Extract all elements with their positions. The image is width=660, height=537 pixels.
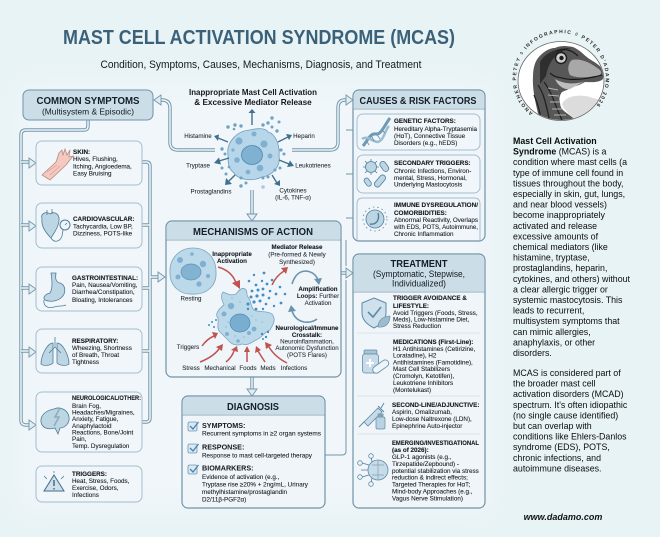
- text: medications: MEDICATIONS (First-Line):: [393, 339, 473, 346]
- text block: condition description: cytokines, and others) without: [513, 274, 631, 284]
- text: medications: Mast Cell Stabilizers: [393, 366, 450, 373]
- text: immune dysregulation: IMMUNE DYSREGULATION/: [394, 202, 478, 209]
- text block: condition description: anaphylaxis, or other: [513, 337, 595, 347]
- symptom card: triggers: [36, 466, 142, 502]
- card: immune dysregulation: [357, 198, 480, 240]
- icon: hand and forearm: [42, 149, 73, 180]
- title: MAST CELL ACTIVATION SYNDROME (MCAS): [63, 27, 455, 49]
- text: neurological: Brain Fog,: [72, 403, 101, 410]
- text: biomarkers criterion: D2/11β-PGF2α): [202, 496, 246, 504]
- card: secondary triggers: [357, 155, 480, 193]
- panel: common symptoms heading: (Multisystem & Episodic): [42, 106, 134, 116]
- arrows: triggers into cell: [200, 267, 288, 363]
- text: trigger avoidance: Meds), Low-histamine Diet,: [393, 316, 470, 324]
- illustration: mast cell releasing mediators: Cytokines: [279, 188, 307, 194]
- text: gastrointestinal: GASTROINTESTINAL:: [72, 275, 138, 282]
- text block: MCAS spectrum: but can overlap with: [513, 421, 592, 431]
- text: neurological: Reactions, Bone/Joint: [72, 430, 134, 436]
- heading: treatment: [373, 258, 465, 288]
- labels: mechanisms: Infections: [281, 365, 307, 372]
- labels: mechanisms: [177, 244, 339, 372]
- text block: condition description: histamine, tryptase,: [513, 253, 590, 263]
- text: trigger avoidance: Avoid Triggers (Foods, Stress,: [393, 310, 478, 317]
- icon: syringe and vial: [359, 403, 385, 429]
- text block: MCAS spectrum: (no single cause identified): [513, 410, 618, 420]
- text: emerging: reduction & indirect effects;: [392, 474, 468, 482]
- icon: lungs: [41, 337, 69, 365]
- labels: mechanisms: Synthesized): [279, 259, 315, 266]
- text: skin: Itching, Angioedema,: [73, 164, 132, 170]
- text: cardiovascular: CARDIOVASCULAR:: [73, 216, 134, 223]
- labels: mechanisms: Autonomic Dysfunction: [275, 345, 339, 352]
- text: medications: Leukotriene Inhibitors: [393, 380, 453, 387]
- text: neurological: Temp. Dysregulation: [72, 443, 130, 450]
- text: emerging: GLP-1 agonists (e.g.,: [392, 454, 452, 461]
- illustration: mast cell releasing mediators: Heparin: [293, 133, 315, 140]
- illustration: mast cell releasing mediators: Histamine: [184, 133, 212, 140]
- text: biomarkers criterion: methylhistamine/prostaglandin: [202, 489, 288, 496]
- text: triggers: Heat, Stress, Foods,: [72, 478, 130, 485]
- heading: treatment: TREATMENT: [390, 258, 448, 270]
- labels: mechanisms: Stress: [182, 365, 200, 372]
- text: secondary triggers: mental, Stress, Hormonal,: [394, 175, 467, 182]
- panel: diagnosis: [182, 396, 325, 508]
- text block: condition description: can mimic allergies,: [513, 327, 591, 337]
- panel: common symptoms heading: [23, 90, 153, 120]
- connectors between panels: [21, 95, 357, 455]
- text: biomarkers criterion: Evidence of activation (e.g.,: [202, 474, 280, 481]
- illustration: resting mast cell: Resting: [181, 296, 202, 302]
- labels: mechanisms: Loops: Further: [297, 293, 339, 300]
- text block: condition description: activated and release: [513, 221, 597, 231]
- icon: shield with leaf: [362, 298, 390, 328]
- text block: condition description: multisystem symptoms that: [513, 316, 620, 326]
- text: response criterion: RESPONSE:: [202, 442, 244, 452]
- text: medications: (Montelukast): [393, 387, 431, 394]
- text: emerging: Tirzepatide/Zepbound) -: [392, 461, 459, 468]
- item: trigger avoidance: [362, 295, 478, 330]
- icon: DNA helix: [362, 118, 390, 146]
- text block: condition description: condition where mast cells (a: [513, 157, 627, 167]
- text: biomarkers criterion: BIOMARKERS:: [202, 464, 254, 472]
- text block: MCAS spectrum: conditions like Ehlers-Danlos: [513, 432, 627, 442]
- text: emerging: Vagus Nerve Stimulation): [392, 496, 463, 502]
- text: second-line: Low-dose Naltrexone (LDN),: [392, 416, 472, 423]
- text: second-line: Aspirin, Omalizumab,: [392, 409, 452, 416]
- labels: mechanisms: Mediator Release: [272, 244, 323, 251]
- text: biomarkers criterion: Tryptase rise ≥20% + 2ng/mL, Urinary: [202, 482, 309, 488]
- labels: mechanisms: Meds: [260, 365, 276, 372]
- labels: mechanisms: Crosstalk:: [292, 332, 322, 339]
- illustration: resting mast cell: [170, 248, 216, 302]
- text block: MCAS spectrum: activation disorders (MCAD): [513, 389, 624, 399]
- text block: MCAS spectrum: MCAS is considered part of: [513, 368, 621, 378]
- labels: mechanisms: (POTS Flares): [287, 352, 327, 359]
- text: neurological: Headaches/Migraines,: [72, 410, 135, 416]
- text block: condition description: leads to recurrent,: [513, 306, 584, 316]
- text: neurological: Anaphylactoid: [72, 423, 112, 430]
- central heading: inappropriate activation: & Excessive Mediator Release: [194, 98, 312, 107]
- text: respiratory: of Breath, Throat: [72, 352, 119, 359]
- text block: condition description: and near blood vessels): [513, 200, 607, 210]
- text: neurological: Anxiety, Fatigue,: [72, 416, 119, 423]
- subtitle: Condition, Symptoms, Causes, Mechanisms, Diagnosis, and Treatment: [100, 59, 422, 71]
- text: trigger avoidance: TRIGGER AVOIDANCE &: [393, 295, 467, 302]
- text: skin: Hives, Flushing,: [73, 156, 118, 163]
- text: second-line: Epinephrine Auto-injector: [392, 423, 462, 430]
- text: immune dysregulation: COMORBIDITIES:: [394, 210, 447, 217]
- text block: condition description: excessive amounts of: [513, 231, 599, 241]
- text: skin: SKIN:: [73, 149, 90, 156]
- text: response criterion: Response to mast cell-targeted therapy: [202, 452, 313, 460]
- item: emerging: [358, 440, 479, 502]
- text block: condition description: tissues throughout the body,: [513, 178, 623, 188]
- text: secondary triggers: Chronic Infections, Environ-: [394, 168, 471, 175]
- panel: common symptoms heading: COMMON SYMPTOMS: [36, 95, 140, 107]
- text: trigger avoidance: Stress Reduction: [393, 323, 441, 330]
- text: triggers: TRIGGERS:: [72, 471, 107, 478]
- text: gastrointestinal: Bloating, Intolerances: [72, 297, 133, 304]
- text: respiratory: Wheezing, Shortness: [72, 345, 132, 352]
- text: immune dysregulation: Abnormal Reactivity, Overlaps: [394, 217, 478, 224]
- text block: condition description: (MCAS) is a: [559, 147, 606, 157]
- labels: mechanisms: Neuroinflammation,: [280, 338, 334, 346]
- text: gastrointestinal: Diarrhea/Constipation,: [72, 289, 135, 296]
- item: medications: [362, 339, 475, 394]
- text block: condition description: Syndrome: [513, 147, 556, 157]
- labels: mechanisms: Foods: [239, 365, 257, 372]
- text: emerging: EMERGING/INVESTIGATIONAL: [392, 440, 479, 447]
- panel: mechanisms of action: [166, 221, 341, 377]
- text block: MCAS spectrum: chronic infections, and: [513, 453, 601, 463]
- text: symptoms criterion: SYMPTOMS:: [202, 421, 245, 430]
- card: genetic factors: [357, 114, 480, 150]
- text block: condition description: become inappropriately: [513, 210, 606, 220]
- labels: mechanisms: (Pre-formed & Newly: [268, 252, 327, 258]
- text: genetic factors: GENETIC FACTORS:: [394, 118, 456, 125]
- illustration: mast cell releasing mediators: (IL-6, TNF-α): [275, 194, 311, 202]
- text: genetic factors: Disorders (e.g., hEDS): [394, 140, 457, 147]
- labels: mechanisms: Activation: [217, 258, 247, 265]
- icon: heart and cuff: [42, 209, 70, 241]
- text: cardiovascular: Tachycardia, Low BP,: [73, 224, 133, 230]
- text: secondary triggers: SECONDARY TRIGGERS:: [394, 160, 471, 167]
- text: skin: Easy Bruising: [73, 170, 112, 178]
- text block: condition description: a clear allergic trigger or: [513, 284, 608, 294]
- item: second-line: [359, 402, 479, 430]
- heading: causes: CAUSES & RISK FACTORS: [360, 95, 476, 107]
- text block: MCAS spectrum: syndrome (EDS), POTS,: [513, 442, 610, 452]
- text: medications: Loratadine), H2: [393, 352, 437, 360]
- text: neurological: NEUROLOGICAL/OTHER:: [72, 395, 141, 402]
- panel: treatment: [353, 254, 485, 508]
- text block: condition description: chemical mediators (like: [513, 242, 608, 252]
- text: immune dysregulation: with EDS, POTS, Autoimmune,: [393, 224, 478, 231]
- text block: condition description: Mast Cell Activation: [513, 136, 597, 146]
- symptom card: respiratory: [36, 329, 142, 373]
- text: neurological: Pain,: [72, 436, 87, 443]
- text: triggers: Infections: [72, 492, 99, 499]
- text: secondary triggers: Underlying Mastocytosis: [394, 182, 462, 188]
- text block: condition description: especially in skin, gut, lungs,: [513, 189, 625, 199]
- text block: condition description: prostaglandins, heparin,: [513, 263, 607, 273]
- text: respiratory: RESPIRATORY:: [72, 338, 118, 345]
- website credit: www.dadamo.com: [524, 512, 602, 522]
- text: emerging: Mind-body Approaches (e.g.,: [392, 488, 473, 496]
- text: symptoms criterion: Recurrent symptoms in ≥2 organ systems: [202, 430, 321, 438]
- icon: warning triangle: [44, 471, 64, 491]
- illustration: mast cell releasing mediators: [184, 109, 331, 202]
- text block: condition description: type of immune cell found in: [513, 168, 623, 178]
- symptom card: gastrointestinal: [36, 267, 142, 311]
- arrows: amplification loop: [288, 271, 322, 322]
- text: immune dysregulation: Chronic Inflammation: [394, 231, 454, 238]
- text: trigger avoidance: LIFESTYLE:: [393, 303, 429, 310]
- text: genetic factors: Hereditary Alpha-Tryptasemia: [394, 126, 478, 133]
- heading: treatment: (Symptomatic, Stepwise,: [373, 269, 465, 279]
- heading: mechanisms: MECHANISMS OF ACTION: [193, 226, 313, 238]
- symptom card: cardiovascular: [36, 203, 142, 248]
- text: emerging: (as of 2026):: [392, 447, 429, 454]
- symptom card: skin: [36, 141, 142, 185]
- illustration: mast cell releasing mediators: Tryptase: [186, 162, 210, 170]
- central heading: inappropriate activation: Inappropriate Mast Cell Activation: [189, 88, 317, 97]
- symptom card: neurological: [36, 392, 142, 452]
- text block: MCAS spectrum: spectrum. It's often idiopathic: [513, 400, 628, 410]
- panel: causes and risk factors: [353, 90, 485, 241]
- text: respiratory: Tightness: [72, 359, 99, 366]
- icon: networked brain: [358, 454, 388, 486]
- icon: immune cell: [363, 207, 387, 231]
- text block: condition description: systemic mastocytosis. This: [513, 295, 623, 305]
- icon: stomach: [44, 273, 66, 308]
- text: medications: H1 Antihistamines (Cetirizine,: [393, 346, 475, 353]
- text: emerging: potential stabilization via stress: [392, 468, 479, 475]
- illustration: mast cell releasing mediators: Leukotrienes: [295, 162, 331, 170]
- text block: condition description: disorders.: [513, 348, 552, 358]
- checklist icons: [188, 422, 198, 474]
- text block: MCAS spectrum: autoimmune diseases.: [513, 463, 602, 473]
- icon: pill bottle and capsule: [362, 350, 390, 375]
- text: medications: Antihistamines (Famotidine),: [393, 360, 473, 366]
- text: medications: (Cromolyn, Ketotifen),: [393, 373, 454, 380]
- labels: mechanisms: Triggers: [177, 344, 199, 351]
- labels: mechanisms: Mechanical: [204, 365, 236, 372]
- text block: MCAS spectrum: the broader mast cell: [513, 379, 596, 389]
- text: triggers: Exercise, Odors,: [72, 485, 119, 492]
- illustration: mast cell releasing mediators: Prostaglandins: [191, 188, 231, 196]
- icon: brain: [41, 408, 69, 434]
- text: cardiovascular: Dizziness, POTS-like: [73, 230, 133, 238]
- icon: microbes: [363, 159, 390, 188]
- text: gastrointestinal: Pain, Nausea/Vomiting,: [72, 282, 138, 289]
- labels: mechanisms: Inappropriate: [212, 251, 252, 258]
- heading: treatment: Individualized): [392, 278, 446, 288]
- text: genetic factors: (HαT), Connective Tissue: [394, 133, 466, 140]
- heading: diagnosis: DIAGNOSIS: [227, 401, 279, 413]
- labels: mechanisms: Amplification: [298, 286, 338, 293]
- illustration: activated mast cell with granules: [208, 272, 286, 345]
- text: emerging: Targeted Therapies for HαT;: [392, 482, 470, 488]
- labels: mechanisms: Activation: [305, 300, 332, 307]
- labels: mechanisms: Neurological/Immune: [276, 325, 339, 332]
- badge: dinosaur seal: ANOTHER PETEY ◊ INFOGRAPHIC ◊ PETER D'ADAMO 2026: [512, 30, 610, 115]
- text: second-line: SECOND-LINE/ADJUNCTIVE:: [392, 402, 479, 409]
